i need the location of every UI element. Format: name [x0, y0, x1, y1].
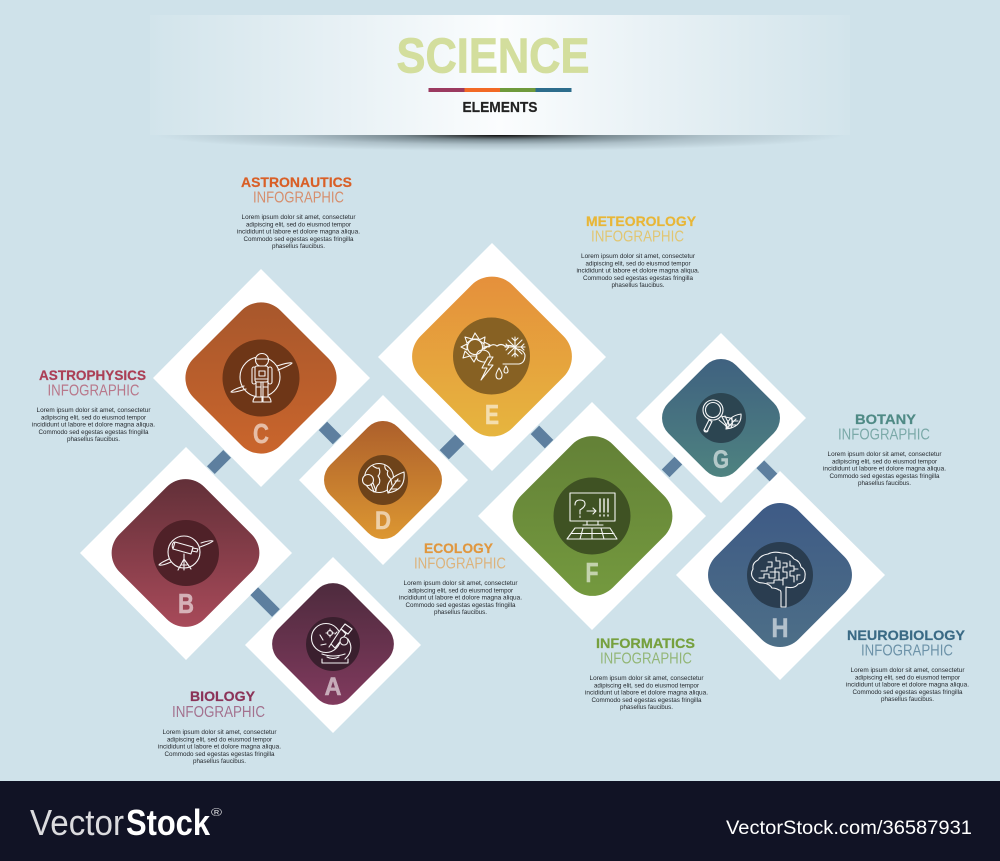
panel: C astronautics — [153, 269, 370, 487]
text block: biology: Commodo sed egestas egestas fringilla — [164, 751, 275, 758]
header banner — [189, 15, 812, 150]
text block: botany: Commodo sed egestas egestas fringilla — [830, 473, 940, 480]
text block: meteorology: METEOROLOGY — [586, 213, 697, 229]
icon: magnifier and leaf — [703, 400, 741, 432]
icon: telescope — [159, 536, 213, 570]
letter C: C — [253, 418, 269, 449]
text block: biology: BIOLOGY — [190, 688, 256, 704]
text block: astrophysics: adipiscing elit, sed do eiusmod tempor — [41, 414, 147, 421]
text block: biology: phasellus faucibus. — [193, 758, 246, 765]
panel: D ecology — [299, 395, 468, 565]
text block: biology: incididunt ut labore et dolore magna aliqua. — [158, 744, 281, 751]
text block: botany: INFOGRAPHIC — [838, 426, 930, 444]
text block: astrophysics — [32, 367, 155, 443]
registered mark: ® — [211, 807, 222, 819]
text block: astrophysics: Lorem ipsum dolor sit amet, consectetur — [36, 407, 151, 414]
text block: botany: incididunt ut labore et dolore magna aliqua. — [823, 466, 946, 473]
panel: E meteorology — [378, 243, 606, 471]
letter F: F — [586, 557, 598, 588]
icon: microscope — [312, 624, 352, 663]
text block: meteorology: adipiscing elit, sed do eiusmod tempor — [586, 260, 691, 267]
panel: H neurobiology — [676, 471, 885, 680]
text block: informatics: phasellus faucibus. — [620, 704, 673, 711]
text block: neurobiology: incididunt ut labore et dolore magna aliqua. — [846, 682, 969, 689]
text block: meteorology: Lorem ipsum dolor sit amet, consectetur — [581, 253, 696, 260]
text block: astronautics: incididunt ut labore et dolore magna aliqua. — [237, 229, 360, 236]
text block: informatics: INFORMATICS — [596, 635, 695, 651]
text block: astrophysics: phasellus faucibus. — [67, 436, 120, 443]
icon: computer — [567, 493, 617, 539]
text block: neurobiology: NEUROBIOLOGY — [847, 627, 966, 643]
text block: meteorology: INFOGRAPHIC — [591, 228, 684, 246]
icon: astronaut — [231, 354, 292, 402]
text block: ecology: Commodo sed egestas egestas fringilla — [406, 602, 516, 609]
text block: ecology: incididunt ut labore et dolore magna aliqua. — [399, 595, 522, 602]
text block: meteorology — [576, 213, 700, 289]
text block: astrophysics: INFOGRAPHIC — [48, 382, 140, 400]
letter B: B — [178, 588, 194, 619]
icon: brain circuit — [752, 552, 805, 607]
text block: ecology: phasellus faucibus. — [434, 609, 487, 616]
letter D: D — [375, 507, 391, 535]
connectors — [207, 422, 778, 617]
text block: informatics: incididunt ut labore et dolore magna aliqua. — [585, 690, 708, 697]
text block: neurobiology: adipiscing elit, sed do eiusmod tempor — [855, 674, 961, 681]
text block: botany: Lorem ipsum dolor sit amet, consectetur — [828, 451, 942, 458]
text block: neurobiology — [846, 627, 969, 703]
text block: botany — [823, 411, 946, 487]
text block: ecology: ECOLOGY — [424, 540, 494, 556]
panel: F informatics — [478, 402, 706, 630]
footer url: VectorStock.com/36587931 — [726, 818, 972, 839]
text block: astronautics — [237, 174, 360, 250]
text block: astronautics: phasellus faucibus. — [272, 243, 325, 250]
text block: botany: BOTANY — [855, 411, 917, 427]
icon: globe, magnifier, leaf — [362, 464, 404, 493]
text block: botany: adipiscing elit, sed do eiusmod tempor — [832, 458, 938, 465]
text block: informatics: Lorem ipsum dolor sit amet, consectetur — [590, 675, 704, 682]
text block: astrophysics: ASTROPHYSICS — [39, 367, 146, 383]
text block: informatics: Commodo sed egestas egestas fringilla — [592, 697, 702, 704]
text block: biology — [158, 688, 281, 765]
text block: astrophysics: Commodo sed egestas egestas fringilla — [38, 429, 149, 436]
text block: informatics: INFOGRAPHIC — [600, 650, 692, 668]
text block: botany: phasellus faucibus. — [858, 480, 911, 487]
banner shadow — [189, 135, 812, 150]
text block: astronautics: Commodo sed egestas egestas fringilla — [244, 236, 354, 243]
text block: meteorology: Commodo sed egestas egestas fringilla — [583, 275, 693, 282]
panel: G botany — [636, 333, 806, 503]
colour bar — [428, 88, 572, 92]
text block: ecology: Lorem ipsum dolor sit amet, consectetur — [404, 580, 518, 587]
text block: neurobiology: Commodo sed egestas egestas fringilla — [852, 689, 963, 696]
letter A: A — [324, 673, 342, 701]
text block: ecology: INFOGRAPHIC — [414, 556, 506, 572]
footer logo bold: Stock — [126, 802, 211, 843]
panel: B astrophysics — [80, 447, 292, 660]
letter G: G — [713, 446, 729, 474]
banner panel — [150, 15, 850, 135]
text block: biology: INFOGRAPHIC — [172, 704, 265, 721]
text block: neurobiology: Lorem ipsum dolor sit amet, consectetur — [850, 667, 965, 674]
text block: neurobiology: phasellus faucibus. — [881, 696, 934, 703]
footer bar — [0, 781, 1000, 861]
text block: astronautics: ASTRONAUTICS — [241, 174, 352, 190]
text block: astrophysics: incididunt ut labore et dolore magna aliqua. — [32, 422, 155, 429]
text block: astronautics: Lorem ipsum dolor sit amet, consectetur — [242, 214, 356, 221]
title: SCIENCE — [396, 30, 590, 84]
letter H: H — [772, 613, 788, 643]
text block: ecology: adipiscing elit, sed do eiusmod tempor — [408, 587, 514, 594]
letter E: E — [485, 399, 499, 430]
text block: astronautics: INFOGRAPHIC — [253, 190, 344, 206]
text block: biology: Lorem ipsum dolor sit amet, consectetur — [162, 729, 277, 736]
text block: informatics: adipiscing elit, sed do eiusmod tempor — [594, 682, 700, 689]
text block: astronautics: adipiscing elit, sed do eiusmod tempor — [246, 221, 352, 228]
text block: neurobiology: INFOGRAPHIC — [861, 642, 953, 660]
text block: biology: adipiscing elit, sed do eiusmod tempor — [167, 736, 273, 743]
text block: ecology — [399, 540, 522, 616]
panel: A biology — [245, 557, 421, 733]
text block: meteorology: phasellus faucibus. — [612, 282, 665, 289]
icon: weather — [461, 333, 525, 380]
text block: informatics — [585, 635, 708, 711]
subtitle: ELEMENTS — [462, 99, 538, 116]
text block: meteorology: incididunt ut labore et dolore magna aliqua. — [576, 268, 700, 275]
footer logo: Vector — [30, 802, 124, 843]
